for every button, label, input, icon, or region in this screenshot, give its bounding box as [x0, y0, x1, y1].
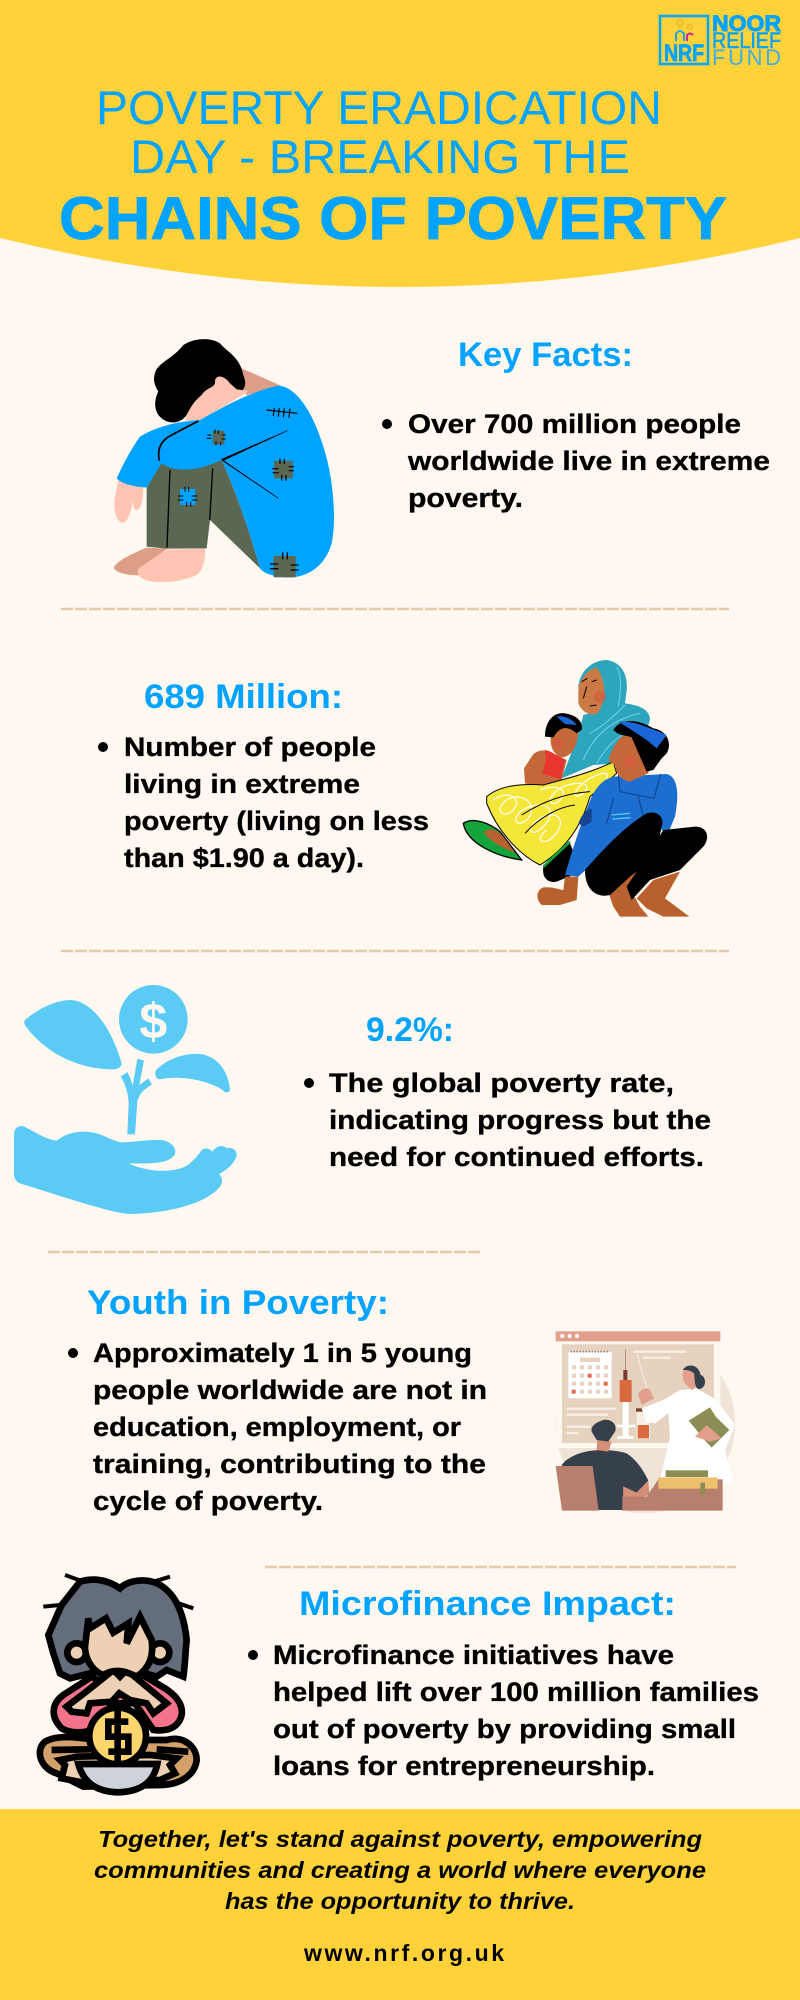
fact: over 700 million: poverty.	[408, 483, 523, 513]
illustration: family sitting together	[463, 660, 707, 917]
fact: 689 million: poverty (living on less	[124, 806, 429, 836]
heading: Microfinance Impact: Microfinance Impact:	[299, 1585, 676, 1623]
header banner	[0, 0, 800, 287]
fact: 689 million: than $1.90 a day).	[124, 843, 364, 873]
fact: 689 million	[98, 732, 429, 873]
fact: youth in poverty: Approximately 1 in 5 young	[93, 1338, 472, 1368]
title: CHAINS OF POVERTY	[59, 185, 727, 252]
logo: Noor Relief Fund: RELIEF	[712, 28, 781, 53]
closing message: communities and creating a world where everyone	[94, 1857, 706, 1883]
fact: global poverty rate: need for continued efforts.	[329, 1142, 704, 1172]
fact: microfinance: out of poverty by providing small	[273, 1714, 736, 1744]
fact: youth in poverty: people worldwide are not in	[93, 1375, 487, 1405]
fact: youth in poverty: education, employment, or	[93, 1412, 462, 1442]
heading: Key Facts: Key Facts:	[458, 336, 633, 374]
title: DAY - BREAKING THE	[130, 130, 630, 183]
title	[59, 81, 727, 252]
illustration: beggar praying with coin and bowl	[40, 1575, 197, 1792]
heading: 689 Million: 689 Million:	[144, 678, 343, 716]
fact: over 700 million: Over 700 million people	[408, 409, 741, 439]
illustration: sad child hugging knees	[114, 339, 334, 582]
fact: youth in poverty: training, contributing to the	[93, 1449, 486, 1479]
fact: microfinance: Microfinance initiatives have	[273, 1640, 674, 1670]
fact: over 700 million: worldwide live in extreme	[407, 446, 770, 476]
fact: microfinance: helped lift over 100 million families	[273, 1677, 759, 1707]
fact: global poverty rate	[304, 1068, 711, 1172]
footer panel	[0, 1809, 800, 2000]
website: www.nrf.org.uk	[303, 1940, 504, 1966]
logo: Noor Relief Fund: FUND	[712, 45, 781, 70]
fact: youth in poverty	[68, 1338, 487, 1516]
title: POVERTY ERADICATION	[96, 81, 662, 134]
fact: global poverty rate: The global poverty rate,	[329, 1068, 674, 1098]
fact: microfinance: loans for entrepreneurship.	[273, 1751, 655, 1781]
illustration: doctor presenting to patient	[555, 1331, 735, 1513]
closing message: has the opportunity to thrive.	[225, 1888, 575, 1914]
logo: Noor Relief Fund: NOOR	[712, 11, 781, 36]
fact: 689 million: living in extreme	[124, 769, 360, 799]
fact: global poverty rate: indicating progress but the	[329, 1105, 711, 1135]
closing message	[94, 1826, 706, 1914]
illustration: hand with plant and dollar coin	[14, 985, 237, 1214]
fact: over 700 million	[382, 409, 770, 513]
heading: Youth in Poverty: Youth in Poverty:	[87, 1284, 389, 1322]
logo: Noor Relief Fund	[660, 11, 781, 70]
closing message: Together, let's stand against poverty, empowering	[98, 1826, 702, 1852]
logo: Noor Relief Fund: NRF	[664, 40, 704, 67]
fact: microfinance	[248, 1640, 759, 1781]
illustration: hand with plant and dollar coin: $	[139, 993, 167, 1049]
fact: youth in poverty: cycle of poverty.	[93, 1486, 323, 1516]
heading: 9.2%: 9.2%:	[366, 1011, 454, 1049]
fact: 689 million: Number of people	[124, 732, 376, 762]
